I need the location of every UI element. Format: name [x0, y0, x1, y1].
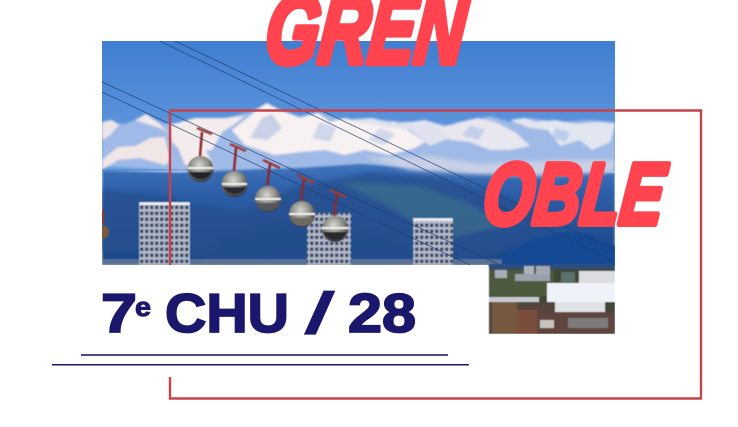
- foothills: [102, 172, 560, 262]
- heading: 7e CHU / 28: /: [303, 283, 336, 344]
- heading: 7e CHU / 28: CHU: [165, 282, 289, 344]
- white caption panel: [102, 265, 488, 340]
- title word: OBLE: OBLE: [479, 146, 671, 243]
- towers: [139, 202, 453, 265]
- heading: 7e CHU / 28: 28: [348, 282, 416, 344]
- heading: 7e CHU / 28: 7: [101, 282, 137, 344]
- sky: [102, 41, 615, 171]
- red outline frame: [170, 110, 701, 398]
- valley and hills: [102, 164, 615, 265]
- dark ridge: [490, 232, 615, 265]
- heading: 7e CHU / 28: e: [135, 292, 151, 322]
- snowy mountain range: [102, 103, 615, 172]
- horizon strip: [102, 259, 502, 266]
- double underline: [52, 354, 469, 366]
- cables: [102, 41, 615, 265]
- cloud band: [365, 156, 615, 176]
- city bottom right: [489, 264, 615, 334]
- heading: 7e CHU / 28: [101, 282, 416, 344]
- cable car 2: [222, 144, 248, 197]
- photo: Grenoble cable cars and Alps: [95, 41, 615, 334]
- cable car: partial left: [102, 210, 109, 239]
- cable car 4: [289, 175, 315, 227]
- cable car 5: [322, 190, 348, 242]
- cable car 3: [255, 160, 281, 212]
- cable car 1: [188, 128, 214, 182]
